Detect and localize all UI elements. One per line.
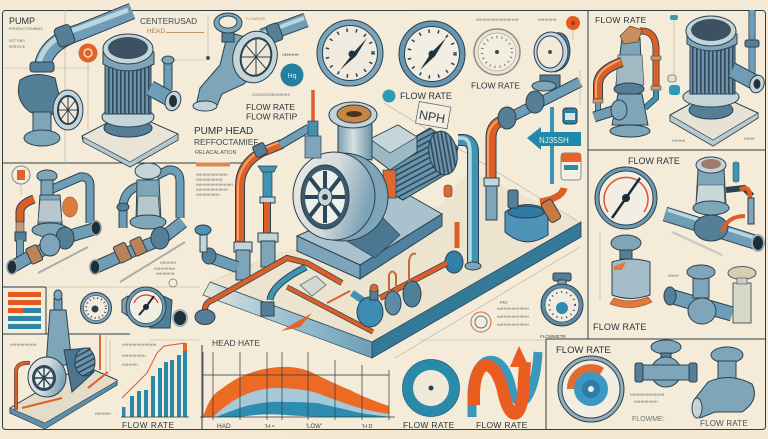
heading: FLOW RATE — [628, 156, 680, 166]
volute and impeller — [293, 152, 388, 241]
gauge: large dial two — [399, 21, 465, 87]
panel: left-middle valve A — [7, 170, 101, 274]
gauge: small stopwatch flowmeter — [540, 273, 583, 339]
valve: tower with horizontal nozzle — [665, 157, 764, 255]
text: pump head heading block: HHHHHHHHHHHHHH — [196, 183, 233, 187]
valves: blue manifold fittings — [352, 254, 447, 327]
heading: PUMP: PUMP — [9, 16, 35, 26]
heading: centrifugal head: HEAD — [147, 28, 165, 35]
panel: left-middle valve B: HHHHHHH — [156, 272, 175, 276]
text: flow rate with teal dot: FLOW RATE — [400, 91, 452, 101]
panel: top-left valve with elbow pipe — [18, 10, 132, 146]
panel: gauge and impeller valve: HHHHHH — [282, 53, 299, 57]
panel: left-middle valve B — [90, 163, 185, 287]
text: pump head heading block — [194, 126, 259, 197]
panel: top-right valve tower and filter pump — [593, 10, 767, 146]
area chart: head rate: 'H D — [362, 424, 373, 430]
text: flow rate labels: FLOW RATIP — [246, 112, 298, 122]
valve tower — [593, 26, 661, 137]
pump: central centrifugal pump — [293, 102, 461, 279]
platform side notes and sketch badge: HHHHHHHHHHHH — [497, 323, 529, 327]
heading: FLOW RATE — [595, 15, 647, 25]
text: flow rate labels: FLOW RATE — [246, 102, 295, 112]
panel: bottom-right flow rate: HHHHHHHHHHHHH — [630, 393, 665, 397]
pipe: vertical teal riser from motor — [458, 138, 481, 270]
area chart: head rate: 'H ≈ — [265, 424, 275, 430]
icon: orange badge — [78, 44, 98, 130]
valve: lower-right pair: HHHH — [668, 274, 679, 278]
icon: small blue meter — [563, 70, 580, 124]
area chart: head rate: 'LOW' — [306, 424, 322, 430]
icon: orange tag badge — [561, 153, 581, 180]
valves: blue pump and fittings on platform — [445, 190, 562, 273]
bar chart: flow rate: FLOW RATE — [122, 421, 175, 430]
bar chart: flow rate: HHHHHHHHH — [122, 354, 146, 358]
icon: orange badge valve A — [12, 166, 30, 195]
icon: teal badge and sensor — [668, 15, 680, 95]
pipe: orange riser and blue run to gauge — [444, 82, 580, 248]
bar chart: flow rate — [121, 343, 189, 430]
panel: bottom-left mini pump assembly: HHHHHHHHHH — [10, 343, 37, 347]
dial: teal ring: FLOW RATE — [403, 420, 455, 430]
platform: isometric base — [203, 103, 581, 358]
panel: bottom-left mini pump assembly — [10, 290, 117, 429]
label: flowmeter: FLOWME: — [632, 416, 665, 423]
panel: gauge and impeller valve — [193, 13, 306, 111]
panel: left-middle valve B: HHHHHH — [160, 261, 176, 265]
text: flow rate with teal dot — [382, 90, 452, 102]
legend: colour bars — [8, 292, 41, 329]
valve: lower-right pair — [664, 265, 756, 324]
gauge: pipe dial with red arc — [122, 287, 187, 328]
arrow: NPSH callout: NJ35SH — [539, 136, 569, 145]
bar chart: flow rate: HHHHHHHHHHHHH — [122, 343, 157, 347]
gauge: pale dial: HHHHHHHHHHHHHHHH — [476, 18, 519, 22]
panel: bottom-left mini pump assembly: HHHHHH — [95, 412, 111, 416]
gauge: red arc dial — [595, 167, 657, 229]
motor — [370, 125, 461, 200]
bar chart: flow rate: HHHHHH — [122, 363, 138, 367]
panel: filter pump — [82, 34, 183, 167]
valve: lower-left body: FLOW RATE — [593, 322, 647, 332]
panel: bottom-right flow rate: HHHHHHHHH — [634, 400, 658, 404]
valve: lower-left body — [593, 232, 652, 332]
valve: double flange — [635, 340, 697, 387]
panel: middle-right gauge and valves — [593, 156, 764, 332]
pump plinth — [297, 190, 442, 279]
text: pump head heading block: HHHHHHHHHHHH — [196, 173, 228, 177]
pipe: left orange risers — [234, 90, 321, 280]
valve: faucet — [692, 347, 754, 418]
gauge: pipe-mounted gauge with orange badge: HHHHHHH — [538, 18, 557, 22]
platform side notes and sketch badge — [395, 247, 580, 358]
label: NPH tag: NPH — [418, 108, 446, 126]
platform side notes and sketch badge: PID — [500, 300, 508, 305]
dial: teal ring — [402, 360, 460, 430]
gauge: small stopwatch flowmeter: FLOWMETR — [540, 334, 566, 339]
filter pump: HHHH — [744, 137, 755, 141]
platform side notes and sketch badge: HHHHHHHHHHHH — [497, 315, 529, 319]
text: pump head heading block: RELACALATION — [195, 150, 236, 156]
text: pump head heading block: HHHHHHHHHHHH — [196, 188, 228, 192]
text: flow rate labels: COOOOOONHHHHHH — [252, 93, 291, 97]
gauge: pipe-mounted gauge with orange badge — [532, 16, 580, 91]
text: pump head heading block: HHHHHHHHH — [196, 193, 220, 197]
chart: S-curve flow arrow — [472, 346, 538, 430]
label: flow rate: FLOW RATE — [700, 419, 748, 428]
panel: left-middle valve B: HHHHHHHH — [154, 267, 176, 271]
text: pump head heading block: HHHHHHHHHH — [196, 178, 223, 182]
icon: teal badge: Hq — [288, 73, 297, 80]
outlet neck — [329, 102, 377, 160]
gauge: large dial one — [317, 20, 383, 86]
label: NPH tag — [415, 102, 451, 129]
text: pump head heading block: REFFOCTAMIEF — [194, 137, 259, 147]
filter pump: HHHHH — [672, 139, 686, 143]
heading: FLOW RATE — [556, 345, 611, 356]
area chart: head rate: HAD — [217, 423, 231, 430]
chart: S-curve flow arrow: FLOW RATE — [476, 420, 528, 430]
panel: bottom-right flow rate — [556, 340, 754, 428]
heading: PUMP — [9, 16, 43, 49]
platform side notes and sketch badge: HHHHHHHHHHHH — [497, 307, 529, 311]
area chart: head rate: HEAD HATE — [212, 338, 260, 348]
gauge: pale dial — [474, 18, 520, 75]
text: pump head heading block: PUMP HEAD — [194, 126, 253, 137]
heading: PUMP: SETTING — [9, 39, 25, 43]
gauge: small dial — [80, 292, 112, 324]
icon: teal badge — [280, 64, 304, 86]
panel: gauge and impeller valve: FLOWRATE — [246, 17, 266, 21]
heading: centrifugal head: CENTERUSAD — [140, 16, 197, 26]
gauge: teal core — [558, 356, 624, 422]
arrow: NPSH callout — [527, 127, 581, 150]
heading: PUMP: SERVICE — [9, 45, 26, 49]
text: flow rate label centre: FLOW RATE — [471, 80, 520, 90]
heading: centrifugal head — [140, 15, 210, 60]
heading: PUMP: PRODUCTIONIMAS — [9, 27, 43, 31]
area chart: head rate — [200, 338, 395, 430]
pipes: orange manifold on platform — [195, 258, 373, 332]
valve: left outlet tee on platform — [195, 225, 237, 267]
text: flow rate labels — [246, 93, 298, 122]
filter pump — [670, 10, 767, 146]
